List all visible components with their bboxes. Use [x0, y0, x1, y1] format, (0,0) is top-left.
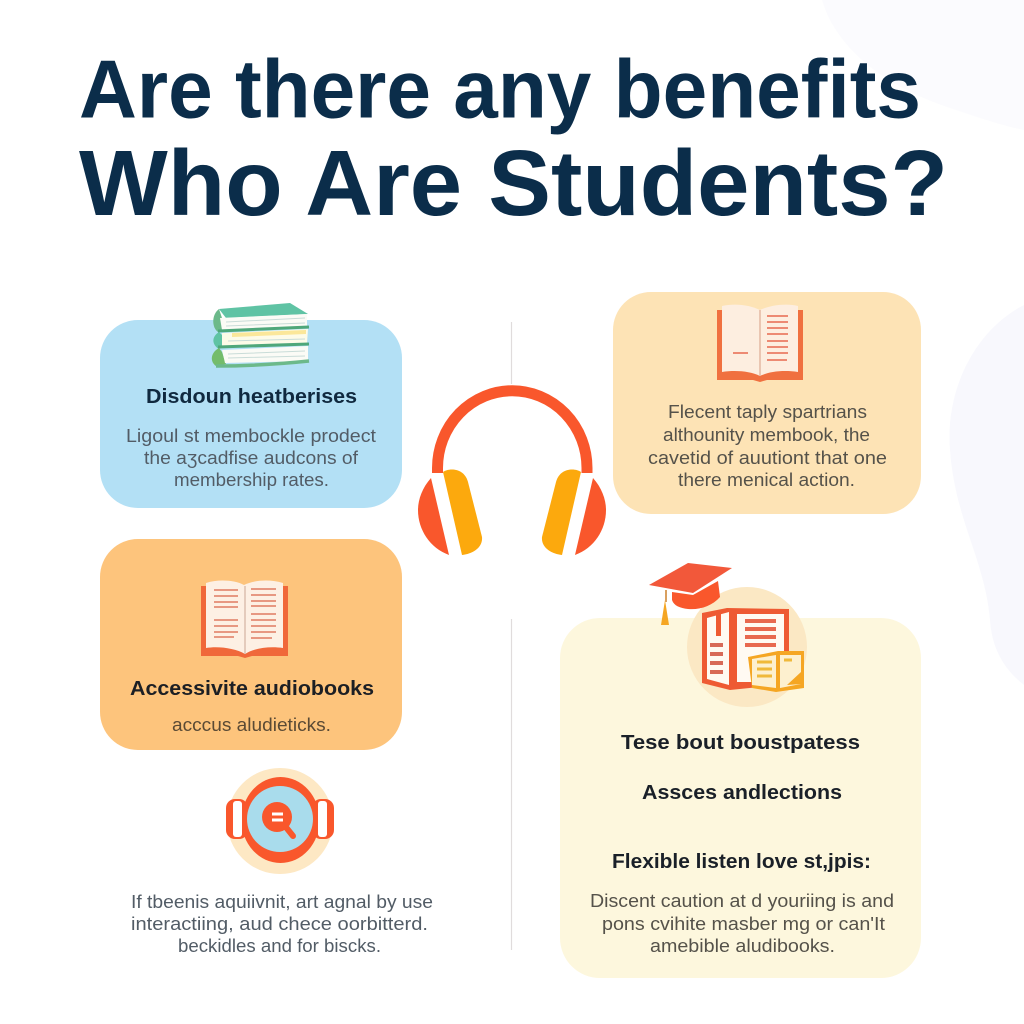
text block: peach card: cavetid of auutiont that one	[648, 448, 887, 468]
text block: yellow card: amebible aludibooks.	[650, 936, 835, 956]
panel: pale yellow card	[560, 563, 921, 978]
icon: open book	[201, 581, 288, 658]
text block: peach card: Flecent taply spartrians	[668, 402, 867, 422]
heading: blue card: Disdoun heatberises	[146, 386, 357, 408]
text block: bottom left: interactiing, aud chece oorbitterd.	[131, 914, 428, 934]
title: Are there any benefits	[79, 42, 921, 136]
panel: orange card	[100, 539, 402, 750]
icon: headphones	[418, 391, 606, 555]
text block: yellow card: pons cvihite masber mg or can'It	[602, 914, 885, 934]
icon: graduation cap and books	[649, 563, 807, 707]
title: Who Are Students?	[79, 131, 948, 235]
heading: orange card: Accessivite audiobooks	[130, 678, 374, 700]
text block: blue card: membership rates.	[174, 470, 329, 490]
text block: bottom left: If tbeenis aquiivnit, art agnal by use	[131, 892, 433, 912]
icon: stack of books	[212, 303, 309, 366]
panel: blue discount card	[100, 303, 402, 508]
text block: bottom left	[131, 892, 433, 956]
text block: blue card	[126, 426, 376, 490]
text block: peach card	[648, 402, 887, 490]
panel: peach card	[613, 292, 921, 514]
icon: open book	[717, 305, 803, 382]
text block: bottom left: beckidles and for biscks.	[178, 936, 381, 956]
title	[79, 42, 948, 235]
text block: blue card: the aʒcadfise audcons of	[144, 448, 359, 468]
text block: blue card: Ligoul st membockle prodect	[126, 426, 376, 446]
text block: yellow card: Discent caution at d youriing is and	[590, 891, 894, 911]
text block: orange card: acccus aludieticks.	[172, 715, 331, 735]
heading: third: Flexible listen love st,jpis:	[612, 851, 871, 873]
text block: peach card: althounity membook, the	[663, 425, 870, 445]
icon: headphone search badge	[226, 768, 334, 874]
text block: yellow card	[590, 891, 894, 956]
heading: second: Assces andlections	[642, 782, 842, 804]
heading: first: Tese bout boustpatess	[621, 732, 860, 754]
text block: peach card: there menical action.	[678, 470, 855, 490]
